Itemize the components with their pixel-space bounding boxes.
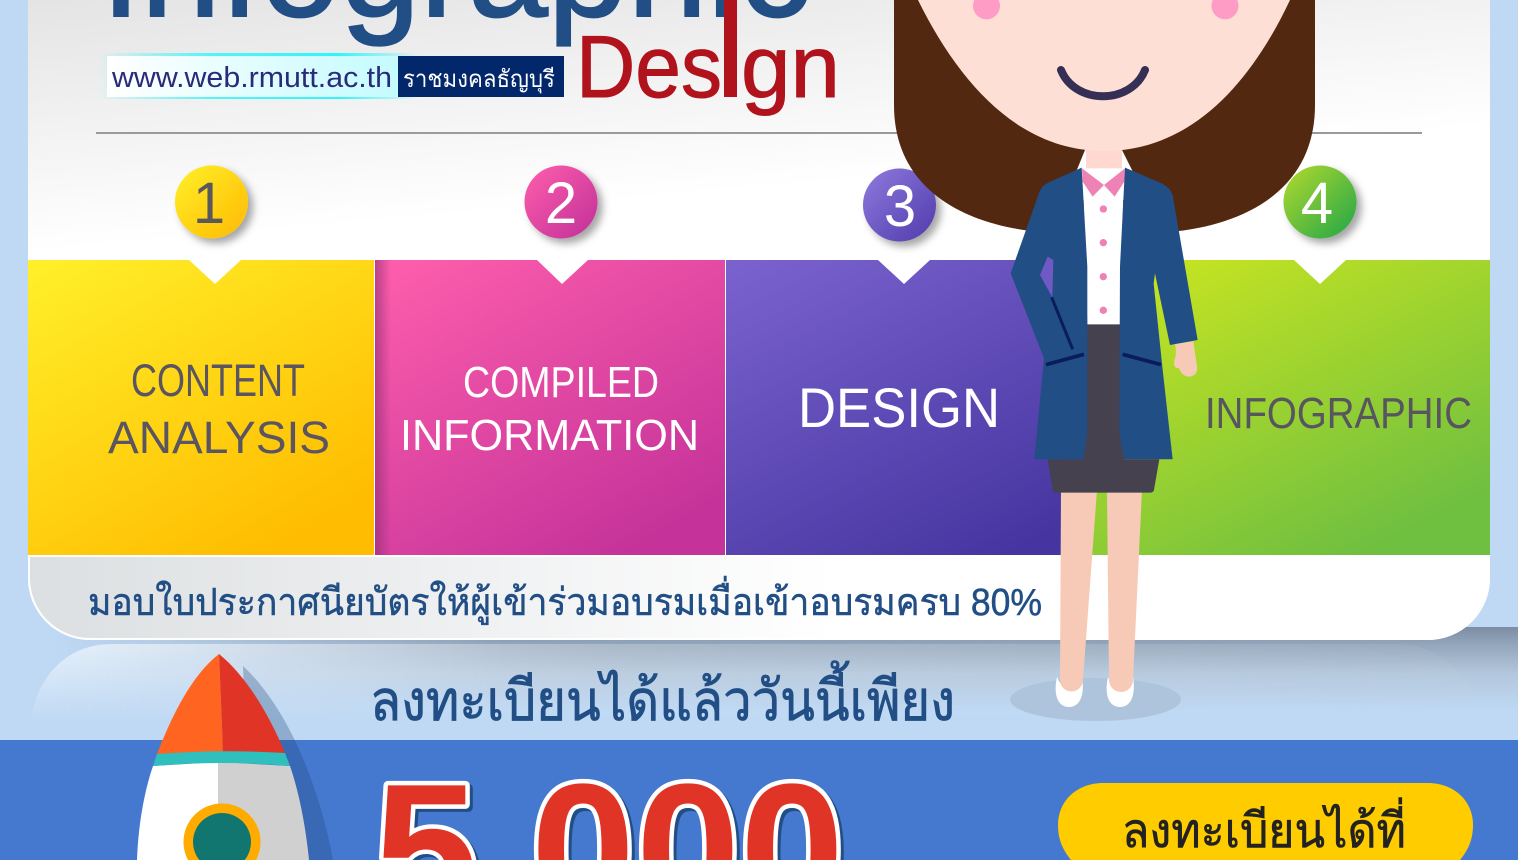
number badge 4 xyxy=(1284,166,1356,238)
rocket porthole xyxy=(184,803,260,860)
website address banner: www.web.rmutt.ac.th xyxy=(111,62,392,94)
website address banner xyxy=(98,53,564,99)
outfit traced from reference xyxy=(1011,168,1198,493)
pink collar xyxy=(1082,168,1104,197)
smile xyxy=(1061,70,1145,96)
panel: step 3 xyxy=(726,260,1130,555)
shoes xyxy=(1056,677,1083,707)
number badge 2 xyxy=(524,166,598,238)
jacket pockets xyxy=(1052,297,1073,349)
divider xyxy=(96,132,1422,134)
bottom blue band xyxy=(0,740,1518,860)
certificate note: มอบใบประกาศนียบัตรให้ผู้เข้าร่วมอบรมเมื่อเข้าอบรมครบ 80% xyxy=(88,576,1042,625)
rocket body left xyxy=(137,762,218,860)
number badge 3 xyxy=(863,168,936,242)
card footer strip xyxy=(29,556,1489,639)
reflection shape under card xyxy=(34,644,1306,704)
panel: step 1 xyxy=(28,260,374,555)
registration headline: ลงทะเบียนได้แล้ววันนี้เพียง xyxy=(370,661,955,732)
number badge 1 xyxy=(175,166,248,238)
panel: step 1: CONTENT xyxy=(131,355,305,406)
number badge 2: 2 xyxy=(545,171,577,236)
title: Design: Des xyxy=(576,17,722,116)
title: Design xyxy=(576,0,840,116)
panel: step 3: DESIGN xyxy=(798,376,1000,439)
panel: step 4: INFOGRAPHIC xyxy=(1205,389,1472,438)
call to action button xyxy=(1058,783,1473,860)
shirt xyxy=(1083,168,1124,324)
neck and collar backing xyxy=(1076,150,1133,200)
rocket teal band xyxy=(153,751,290,766)
number badge 3: 3 xyxy=(884,174,916,239)
panel: main white card xyxy=(28,0,1490,640)
shirt buttons xyxy=(1100,205,1107,213)
icon: rocket xyxy=(137,654,333,860)
panel: step 2: COMPILED xyxy=(463,358,659,407)
panel: step 4 xyxy=(1075,260,1490,555)
call to action button: ลงทะเบียนได้ที่ xyxy=(1122,797,1406,858)
legs xyxy=(1060,490,1097,680)
panel: step 2 xyxy=(375,260,725,555)
panel: step 2: INFORMATION xyxy=(400,411,699,460)
rocket nose xyxy=(157,654,223,754)
rocket body right xyxy=(218,762,309,860)
hand xyxy=(1174,341,1197,377)
website address banner: ราชมงคลธัญบุรี xyxy=(403,66,555,94)
hair xyxy=(894,0,1315,232)
title: Design: gn xyxy=(741,17,840,116)
skirt xyxy=(1048,323,1159,493)
floor shadow xyxy=(1010,678,1181,721)
number badge 1: 1 xyxy=(193,171,225,236)
face xyxy=(918,0,1290,151)
jacket left xyxy=(1011,168,1087,459)
rocket shadow xyxy=(243,666,333,860)
arm gap left xyxy=(1040,257,1053,297)
character illustration xyxy=(894,0,1315,721)
number badge 4: 4 xyxy=(1301,171,1333,236)
jacket right xyxy=(1119,168,1198,459)
cheeks xyxy=(973,0,1000,19)
shadow under card xyxy=(110,627,1518,698)
panel: step 1: ANALYSIS xyxy=(108,412,330,463)
